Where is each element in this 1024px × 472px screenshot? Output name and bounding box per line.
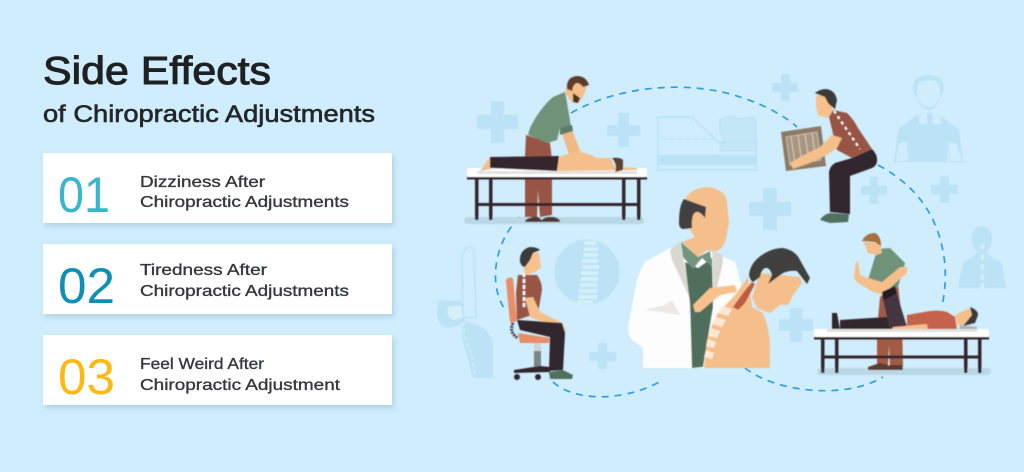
icon: person spine silhouette bbox=[958, 226, 1006, 288]
scene: seated man on chair bbox=[506, 247, 573, 380]
subtitle: of Chiropractic Adjustments bbox=[43, 101, 375, 128]
scene: man lifting box bbox=[781, 89, 877, 223]
card 02: tiredness bbox=[43, 244, 392, 314]
background medical icons bbox=[437, 74, 1006, 378]
card 01: dizziness: Dizziness After bbox=[140, 174, 266, 191]
scene: doctor examining spine bbox=[628, 187, 810, 368]
scene: massage on table bbox=[464, 76, 647, 224]
card 02: tiredness: Chiropractic Adjustments bbox=[140, 283, 349, 300]
icon: side spine silhouette bbox=[437, 247, 493, 378]
icon: person neck silhouette bbox=[894, 75, 963, 162]
card 02: tiredness: Tiredness After bbox=[140, 262, 268, 279]
dashed connector path bbox=[495, 87, 945, 397]
card 03: feel weird: Chiropractic Adjustment bbox=[140, 377, 341, 394]
card 03: feel weird: 03 bbox=[58, 349, 115, 405]
icon: side-lying body outline bbox=[658, 116, 756, 170]
card 01: dizziness: 01 bbox=[58, 167, 110, 223]
title: Side Effects bbox=[43, 50, 271, 93]
card 01: dizziness: Chiropractic Adjustments bbox=[140, 194, 349, 211]
card 03: feel weird bbox=[43, 335, 392, 405]
card 02: tiredness: 02 bbox=[58, 258, 115, 314]
scene: leg stretch on table bbox=[814, 233, 991, 375]
card 03: feel weird: Feel Weird After bbox=[140, 356, 265, 373]
icon: spine scan circle bbox=[554, 240, 620, 304]
card 01: dizziness bbox=[43, 153, 392, 223]
